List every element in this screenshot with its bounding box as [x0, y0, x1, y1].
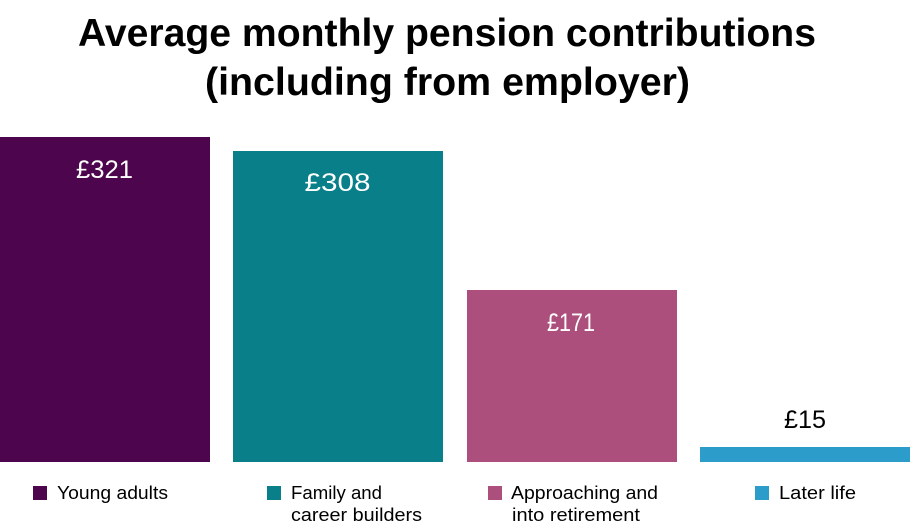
- legend: Approaching and into retirement: Approaching and: [511, 483, 658, 503]
- legend: Family and career builders: Family and: [291, 483, 382, 503]
- title: (including from employer): [205, 61, 690, 104]
- legend: Approaching and into retirement: [488, 483, 658, 525]
- bar: Young adults £321: £321: [76, 156, 133, 184]
- bar: Young adults £321: [0, 137, 210, 462]
- bar: Approaching and into retirement £171: £171: [547, 309, 595, 337]
- title: Average monthly pension contributions: [78, 12, 816, 55]
- legend: Family and career builders: career builders: [291, 505, 422, 525]
- bar: Family and career builders £308: £308: [304, 169, 370, 197]
- legend: Approaching and into retirement: into retirement: [512, 505, 640, 525]
- legend: Family and career builders: [267, 483, 422, 525]
- legend: Later life: [755, 483, 856, 503]
- title: [78, 12, 816, 104]
- bar: Later life £15: £15: [784, 406, 826, 434]
- bar: Family and career builders £308: [233, 151, 443, 462]
- bar: Approaching and into retirement £171: [467, 290, 677, 462]
- legend: Later life: Later life: [779, 483, 856, 503]
- legend: Young adults: Young adults: [57, 483, 168, 503]
- bar: Later life £15: [700, 406, 910, 462]
